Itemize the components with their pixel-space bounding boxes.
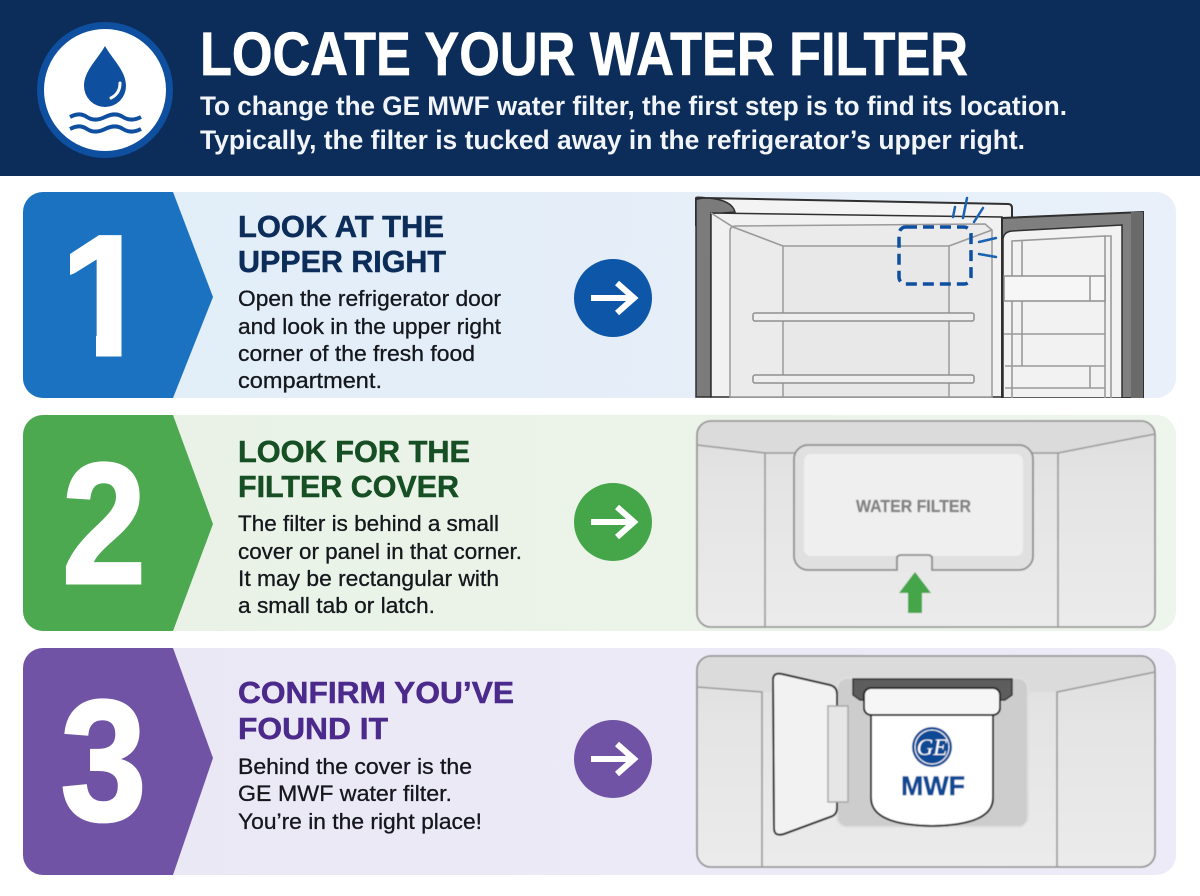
- step 2 number block: [23, 415, 213, 631]
- panel: step 2: [23, 415, 1176, 631]
- GE MWF water filter: [864, 688, 1000, 826]
- step 2 heading: LOOK FOR THE: [238, 435, 470, 469]
- icon: water drop and waves: [40, 26, 170, 154]
- step 2 text: [238, 511, 522, 618]
- callout: dashed filter location: [899, 198, 996, 284]
- step 1 heading: LOOK AT THE: [238, 210, 444, 244]
- step 2 heading: FILTER COVER: [238, 470, 459, 504]
- illustration: open refrigerator: [696, 198, 1143, 398]
- step 1 text: and look in the upper right: [238, 314, 502, 339]
- step 2 text: cover or panel in that corner.: [238, 539, 522, 564]
- refrigerator door: [1002, 212, 1143, 398]
- arrow: step 3: [574, 720, 652, 798]
- header banner: [0, 0, 1200, 176]
- GE logo: GE: [917, 735, 947, 760]
- step 1 text: corner of the fresh food: [238, 341, 475, 366]
- GE MWF water filter: MWF: [901, 771, 965, 801]
- open cover door: [773, 674, 848, 835]
- step 1 heading: [238, 210, 446, 279]
- arrow: step 2: [574, 483, 652, 561]
- step 1 text: compartment.: [238, 368, 382, 393]
- step 3 number block: 3: [60, 665, 146, 857]
- step 3 heading: FOUND IT: [238, 712, 388, 746]
- illustration: filter revealed: [697, 656, 1155, 867]
- subtitle: To change the GE MWF water filter, the first step is to find its location.: [200, 91, 1067, 121]
- icon: green up arrow: [899, 572, 931, 613]
- step 3 text: [238, 754, 482, 834]
- step 3 heading: [238, 676, 514, 746]
- arrow: step 1: [574, 259, 652, 337]
- step 1 text: [238, 286, 502, 393]
- panel: step 1: [23, 192, 1176, 398]
- step 1 heading: UPPER RIGHT: [238, 245, 446, 279]
- step 2 heading: [238, 435, 470, 504]
- filter recess: [837, 678, 1028, 827]
- step 1 number block: [23, 192, 213, 398]
- illustration: filter cover: [697, 421, 1155, 627]
- step 3 text: GE MWF water filter.: [238, 781, 452, 806]
- filter cover panel: WATER FILTER: [856, 496, 971, 516]
- step 2 number block: 2: [62, 428, 146, 620]
- subtitle: Typically, the filter is tucked away in the refrigerator’s upper right.: [200, 125, 1025, 155]
- step 3 text: You’re in the right place!: [238, 809, 482, 834]
- panel: step 3: [23, 648, 1176, 875]
- step 1 number block: 1: [58, 200, 154, 392]
- subtitle: [200, 91, 1067, 155]
- step 2 text: a small tab or latch.: [238, 593, 435, 618]
- step 3 number block: [23, 648, 213, 875]
- step 3 heading: CONFIRM YOU’VE: [238, 676, 514, 710]
- step 3 text: Behind the cover is the: [238, 754, 472, 779]
- step 1 text: Open the refrigerator door: [238, 286, 502, 311]
- step 2 text: The filter is behind a small: [238, 511, 499, 536]
- step 2 text: It may be rectangular with: [238, 566, 499, 591]
- filter cover panel: [794, 445, 1033, 570]
- title: LOCATE YOUR WATER FILTER: [200, 20, 968, 88]
